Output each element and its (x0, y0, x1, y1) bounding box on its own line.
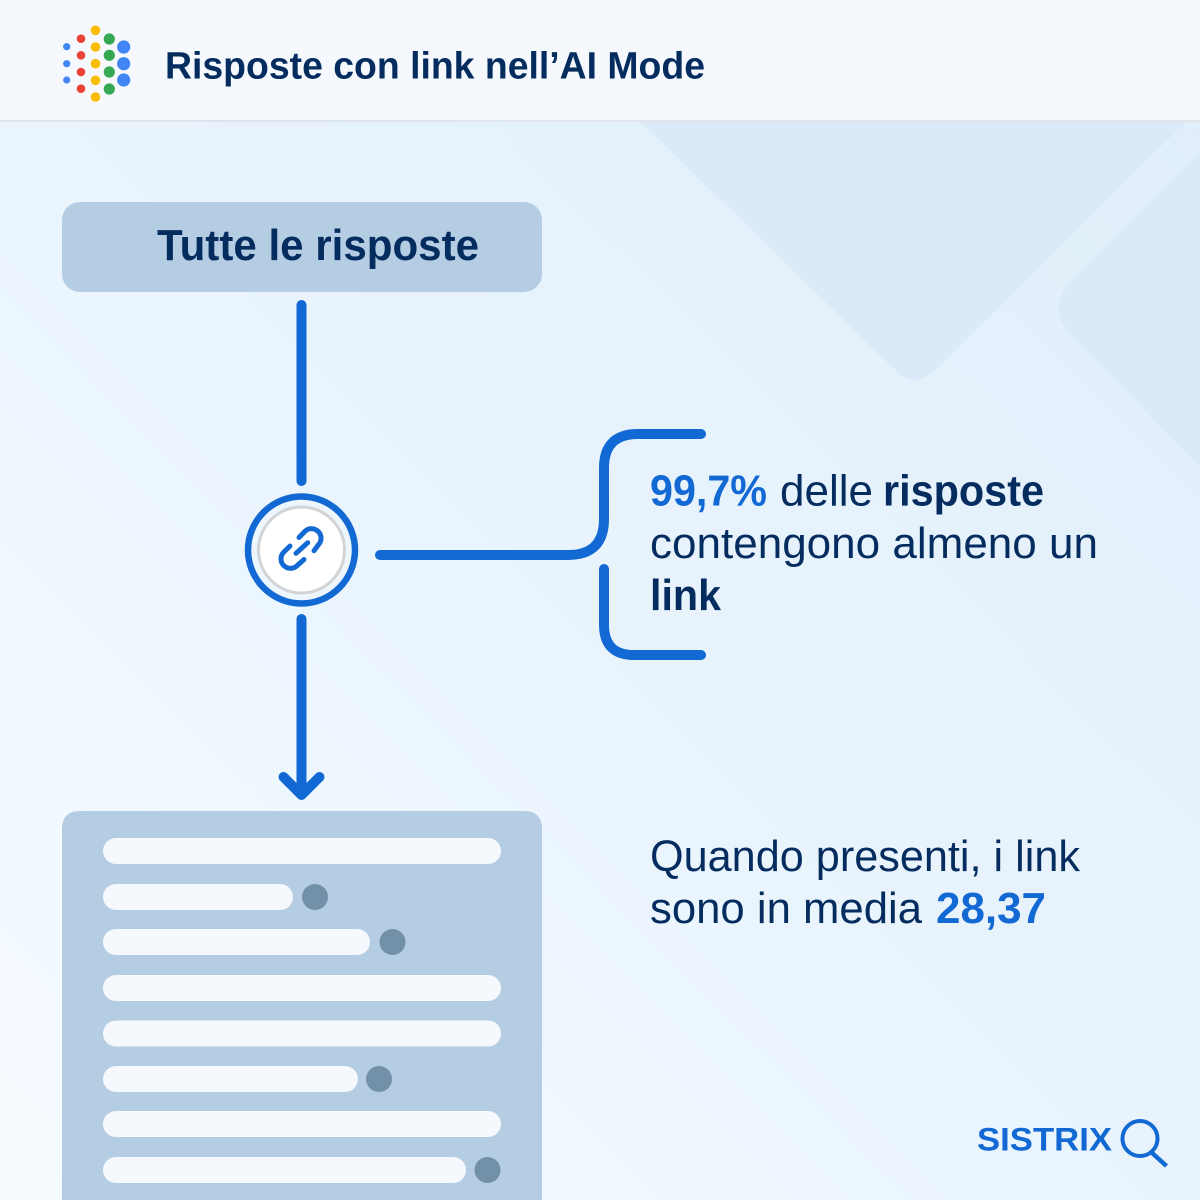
panel: all answers (62, 202, 542, 292)
link dots (302, 884, 500, 1183)
icon: link in circle (248, 496, 355, 604)
panel heading: Tutte le risposte (157, 221, 479, 270)
SISTRIX logo (977, 1121, 1166, 1166)
text block: share of answers with links: 99,7% (650, 466, 767, 516)
text block: share of answers with links: risposte (883, 466, 1044, 516)
title: Risposte con link nell’AI Mode (165, 46, 705, 88)
text block: share of answers with links (650, 466, 1098, 620)
arrow: down to source list (284, 619, 320, 795)
text lines (103, 838, 501, 1183)
connector bracket (380, 434, 701, 655)
text block: average links: Quando presenti, i link (650, 832, 1081, 881)
icon: AI Mode dot logo (63, 26, 130, 102)
panel: answer with links (62, 811, 542, 1200)
text block: average links: 28,37 (936, 884, 1046, 933)
text block: share of answers with links: delle (780, 466, 873, 516)
arrow: line from panel to link icon (296, 305, 306, 481)
text block: average links: sono in media (650, 884, 923, 933)
SISTRIX logo: SISTRIX (977, 1122, 1113, 1158)
text block: share of answers with links: link (650, 571, 721, 620)
header bar (0, 0, 1200, 122)
text block: share of answers with links: contengono almeno un (650, 519, 1098, 568)
text block: average links (650, 832, 1081, 933)
